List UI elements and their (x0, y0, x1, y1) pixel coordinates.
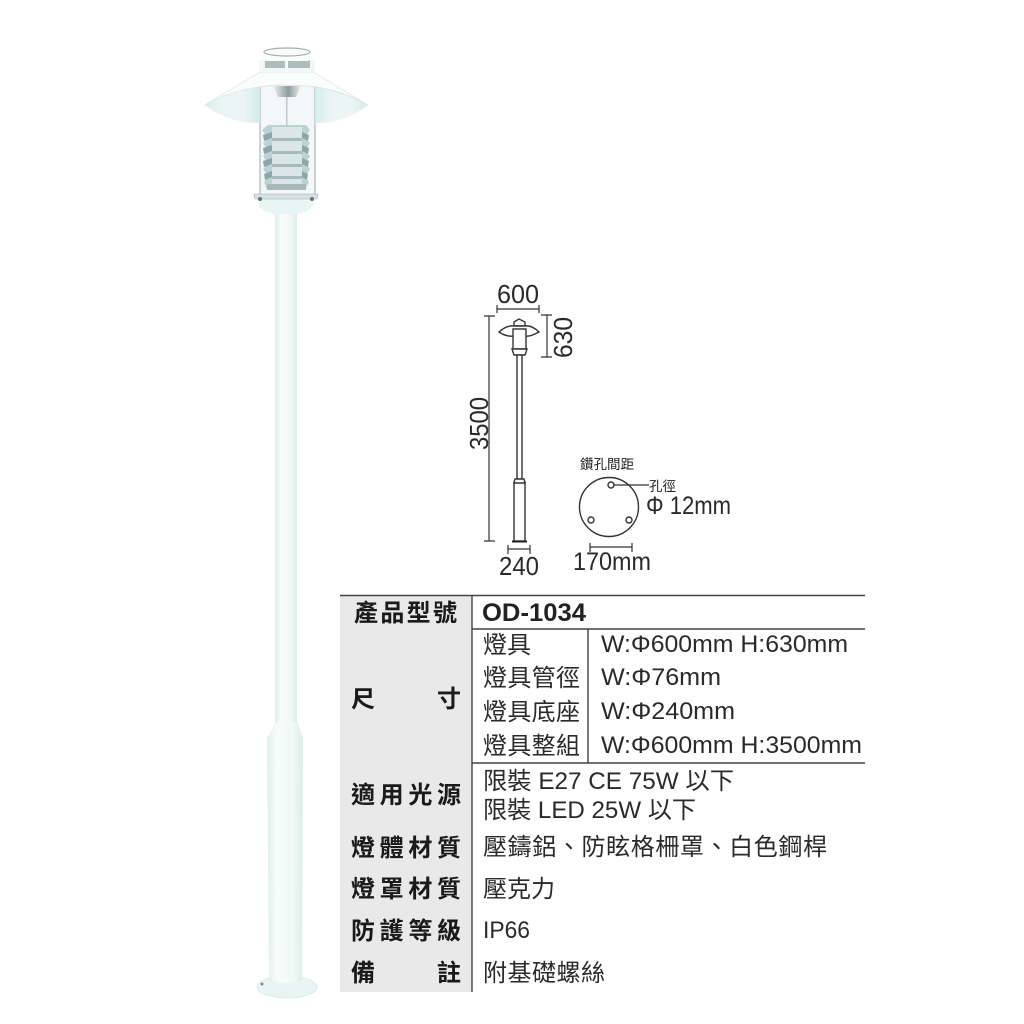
lamp base plate (257, 976, 317, 998)
row: dimensions: W:Φ600mm H:3500mm (601, 732, 862, 759)
row: dimensions: W:Φ600mm H:630mm (601, 631, 848, 658)
lamp base column (267, 722, 303, 983)
mounting base circle (580, 478, 638, 536)
dimension label 240: 240 (499, 551, 539, 581)
row: model: 產品型號 (354, 599, 457, 627)
lamp flange (254, 194, 318, 201)
lamp outline drawing (499, 319, 539, 542)
lamp pole (275, 212, 297, 730)
height bracket 3500 (484, 316, 495, 541)
product photo: street lamp (205, 48, 368, 998)
spacing value: 170mm (573, 548, 651, 576)
lamp top vent (259, 48, 315, 72)
row: shade material (351, 876, 555, 903)
lamp shade (205, 72, 368, 123)
row: light source: 限裝 E27 CE 75W 以下 (483, 768, 734, 795)
table lines (340, 596, 865, 763)
row: notes: 備 (351, 960, 375, 987)
width bracket 240 (508, 545, 530, 554)
hole diameter value: Φ 12mm (646, 492, 731, 520)
dimension label 3500: 3500 (464, 397, 494, 450)
row: body material: 壓鑄鋁、防眩格柵罩、白色鋼桿 (483, 834, 827, 861)
row: notes (351, 960, 605, 987)
row: notes: 附基礎螺絲 (483, 960, 605, 987)
row: notes: 註 (437, 960, 461, 987)
row: dimensions: 燈具整組 (483, 733, 580, 760)
row: protection class (351, 917, 530, 945)
row: dimensions: 燈具 (483, 632, 531, 659)
dimension label 630: 630 (548, 317, 578, 358)
row: dimensions (351, 631, 862, 760)
row: dimensions: 寸 (437, 686, 461, 713)
row: light source: 限裝 LED 25W 以下 (483, 797, 696, 824)
drill spacing label: 鑽孔間距 (580, 457, 634, 472)
hole leader line (614, 484, 649, 486)
width bracket 600 (497, 305, 539, 313)
row: dimensions: 燈具底座 (483, 699, 580, 726)
height bracket 630 (541, 315, 552, 357)
row: shade material: 壓克力 (483, 876, 555, 903)
row: protection class: 防護等級 (351, 918, 461, 945)
row: body material: 燈體材質 (351, 835, 461, 862)
row: model: OD-1034 (482, 599, 586, 627)
row: model (354, 599, 586, 627)
row: dimensions: 燈具管徑 (483, 665, 580, 692)
specification table (340, 596, 865, 992)
lamp glass and lens (260, 84, 315, 194)
row: protection class: IP66 (483, 917, 530, 944)
row: dimensions: W:Φ240mm (601, 698, 735, 725)
row: light source: 適用光源 (351, 781, 461, 809)
row: dimensions: W:Φ76mm (601, 664, 721, 691)
row: dimensions: 尺 (351, 686, 375, 713)
hole diameter label: 孔徑 (649, 479, 676, 494)
dimension drawing (464, 279, 731, 581)
lamp collar (259, 199, 313, 214)
dimension label 600: 600 (497, 279, 539, 309)
table label column (340, 596, 472, 992)
spacing bracket (590, 543, 632, 552)
row: shade material: 燈罩材質 (351, 876, 461, 903)
row: light source (351, 768, 734, 824)
row: body material (351, 834, 827, 862)
